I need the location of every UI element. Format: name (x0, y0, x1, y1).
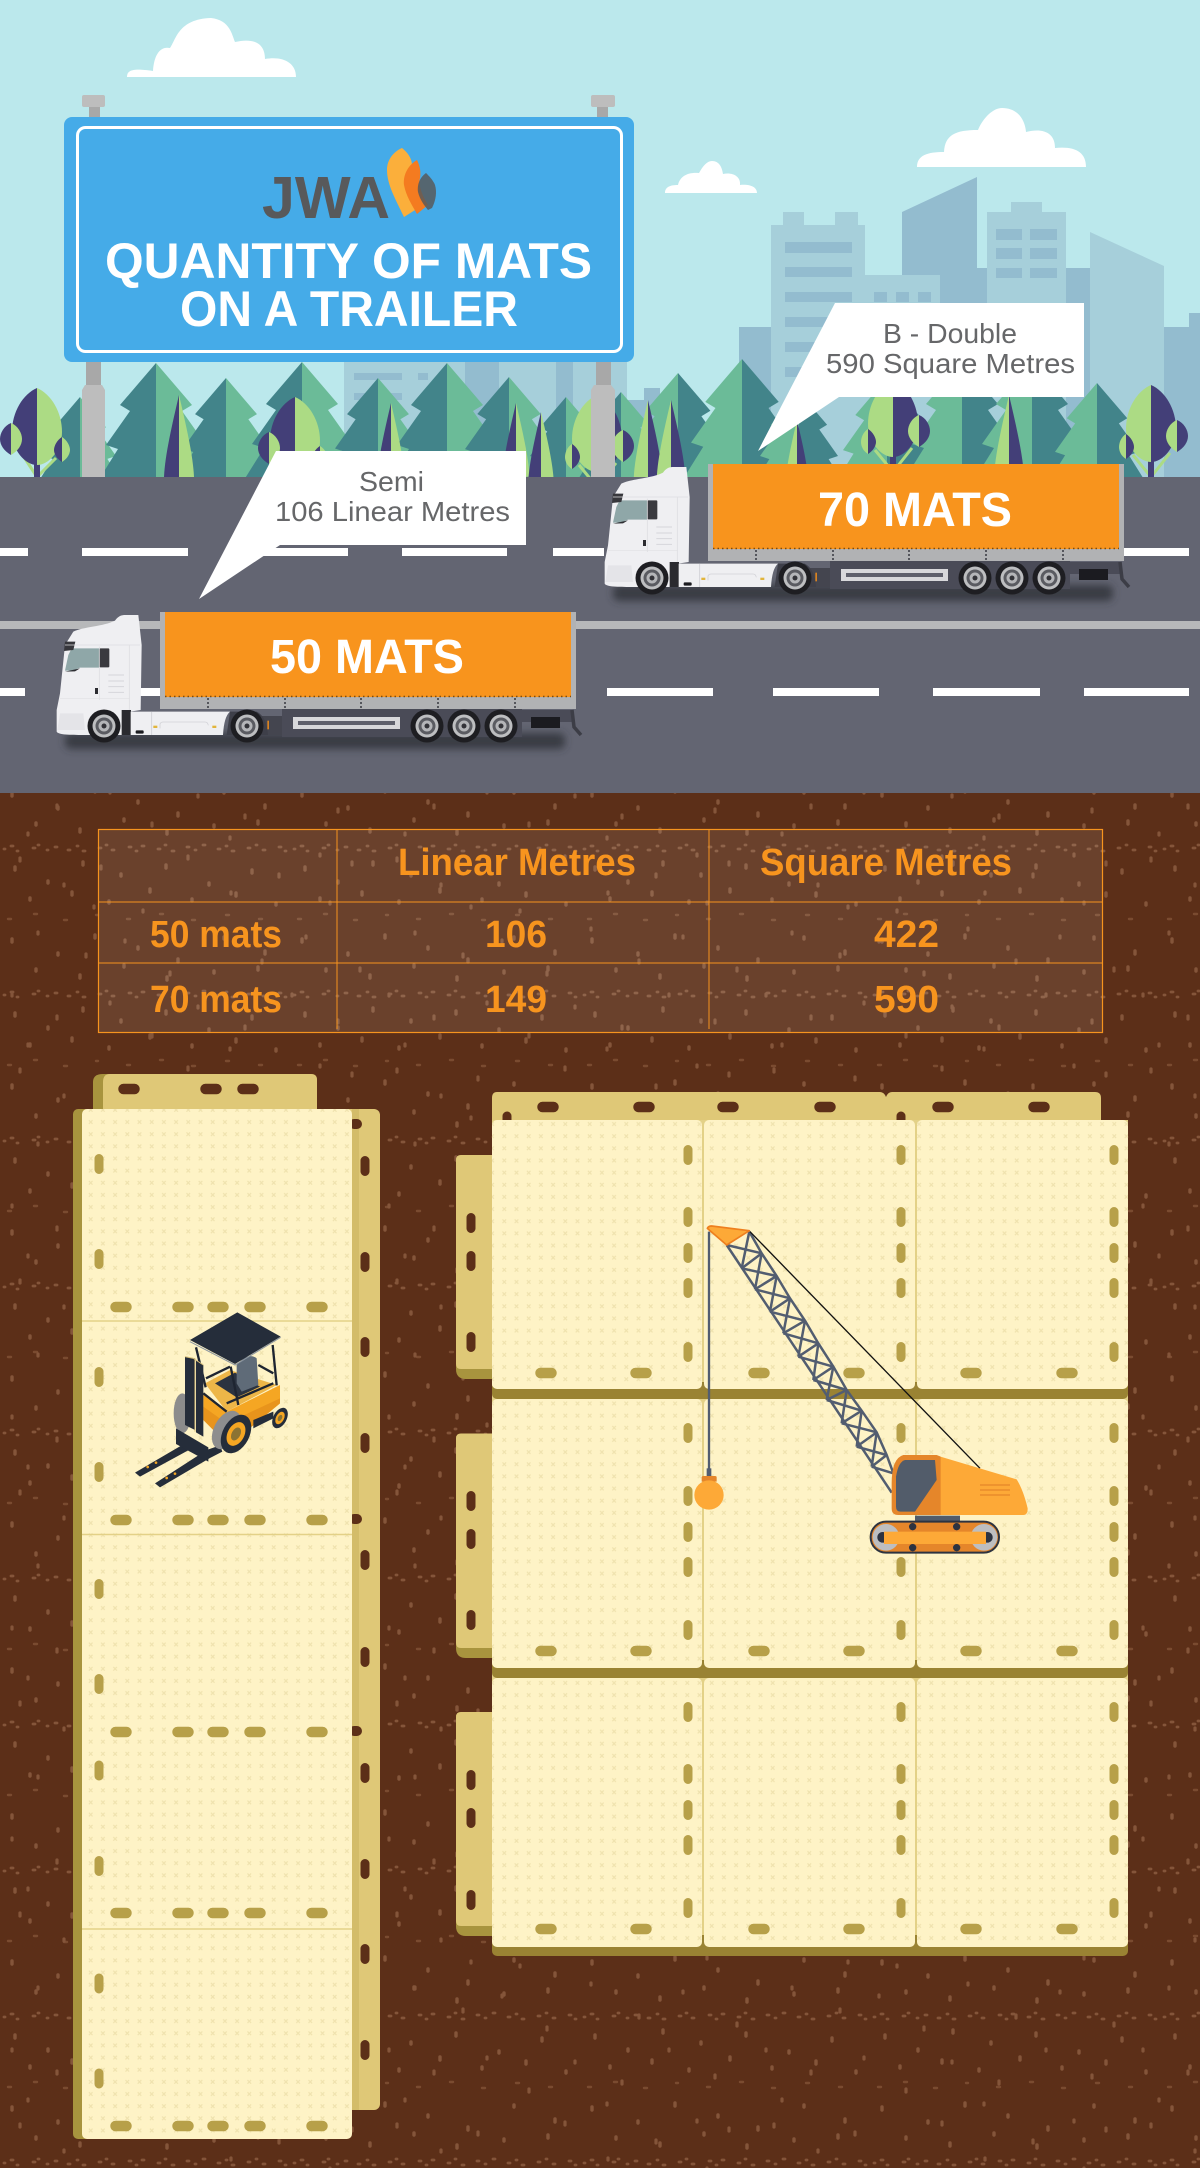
crawler track (871, 1522, 999, 1553)
table row: 70 mats: 149 (485, 979, 547, 1021)
ground soil background (0, 793, 1200, 2168)
table row: 50 mats: 106 (485, 914, 547, 956)
title text: QUANTITY OF MATS (105, 233, 592, 289)
table header row: Linear Metres (398, 842, 636, 884)
table row: 50 mats: 50 mats (150, 914, 282, 956)
mat row 3 (492, 1678, 1128, 1956)
road surface (0, 477, 1200, 793)
callout: Semi: Semi (359, 466, 424, 497)
cloud: small middle (665, 161, 757, 193)
logo: JWA wordmark with flame: JWA (262, 165, 390, 231)
callout: Semi: 106 Linear Metres (275, 496, 510, 527)
truck: B-Double with 70 mats (605, 464, 1129, 601)
logo: JWA wordmark with flame (262, 148, 436, 231)
square mat grid (nine mats, B-Double) (456, 1092, 1128, 1956)
crane cable and ball (694, 1232, 724, 1510)
mat underlay (492, 1120, 1128, 1950)
forest of pine and round trees (0, 359, 1188, 487)
sign: left post (82, 95, 105, 477)
callout: Semi (199, 451, 526, 599)
city skyline (344, 177, 1200, 477)
icon: forklift (135, 1312, 291, 1487)
truck: Semi with 50 mats: 50 MATS (270, 631, 464, 684)
mat row 2 (492, 1399, 1128, 1678)
callout: B-Double: B - Double (883, 318, 1017, 349)
sign: right post (591, 95, 615, 477)
left edge flaps (456, 1155, 500, 1936)
truck: Semi with 50 mats (57, 612, 581, 749)
table row: 70 mats: 70 mats (150, 979, 282, 1021)
sky background (0, 0, 1200, 480)
table header row (398, 842, 1012, 884)
crane cab and body (892, 1455, 1028, 1521)
table row: 50 mats: 422 (874, 914, 939, 956)
cloud: top right (917, 108, 1086, 167)
table header row: Square Metres (760, 842, 1012, 884)
callout: B-Double (758, 303, 1084, 451)
road markings (0, 548, 1200, 696)
mat row 1 (492, 1120, 1128, 1399)
table row: 70 mats: 590 (874, 979, 939, 1021)
icon: crawler crane with wrecking ball (694, 1226, 1028, 1553)
cloud: left (127, 18, 296, 77)
data table (98, 830, 1103, 1032)
table row: 50 mats (150, 914, 939, 956)
top edge flaps (492, 1092, 1101, 1130)
title sign board: ON A TRAILER (180, 281, 518, 337)
callout: B-Double: 590 Square Metres (826, 348, 1075, 379)
title sign board (64, 117, 634, 362)
cross-hatch grip texture (492, 1120, 1128, 1947)
truck: B-Double with 70 mats: 70 MATS (818, 484, 1012, 537)
table row: 70 mats (150, 979, 939, 1021)
lattice boom (727, 1232, 894, 1493)
connector slots (540, 1150, 1114, 1929)
linear mat run (five mats, semi trailer) (73, 1074, 380, 2139)
